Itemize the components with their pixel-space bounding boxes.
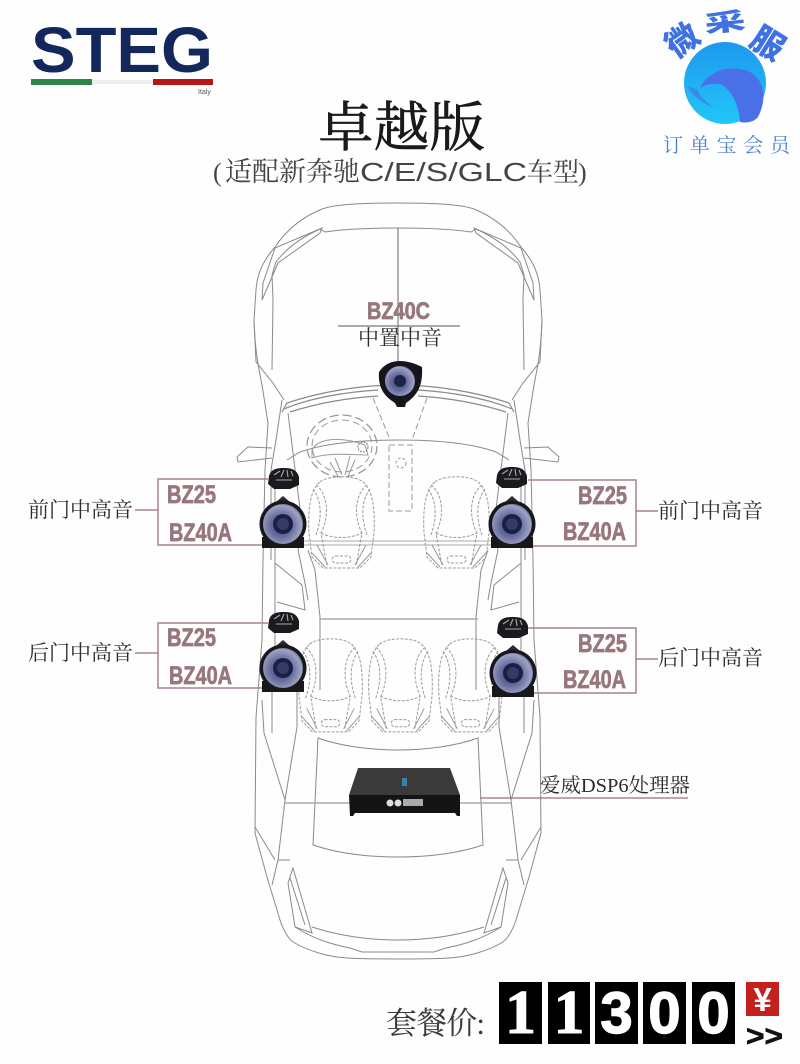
price block: 1 [505, 979, 536, 1047]
subtitle: C/E/S/GLC [360, 157, 527, 187]
woofer: front left [260, 496, 306, 548]
callout: front left: BZ40A [169, 519, 232, 547]
logo: STEG: Italy [198, 89, 211, 96]
rear seat middle [369, 639, 432, 732]
tweeter: front right [496, 467, 527, 488]
badge orb [684, 42, 766, 124]
rear seat left [299, 639, 362, 732]
subtitle: 适配新奔驰 [225, 157, 360, 187]
subtitle: 车型 [527, 158, 579, 187]
badge arc title: 采 [703, 1, 748, 40]
car body left half [237, 203, 398, 959]
arrows: >> [746, 1020, 783, 1053]
DSP callout: 爱威DSP6处理器 [540, 774, 690, 797]
front seat right [424, 477, 489, 568]
DSP processor unit [349, 768, 460, 816]
badge arc title [654, 1, 796, 70]
cabin cross bar [265, 541, 530, 545]
subtitle: ) [578, 158, 587, 187]
callout: rear right: 后门中高音 [658, 646, 763, 670]
centre console [373, 398, 427, 511]
digit 1 [499, 982, 542, 1044]
digit 1 [548, 982, 590, 1044]
roof rear line [320, 618, 478, 620]
woofer: front right [488, 496, 536, 548]
callout: front right: 前门中高音 [658, 499, 763, 523]
front seat left [309, 477, 374, 568]
steering wheel [307, 415, 377, 477]
callout: front right: BZ40A [563, 518, 626, 546]
rear seat right [439, 639, 502, 732]
tweeter: front left [268, 468, 299, 489]
callout: front right: BZ25 [578, 482, 627, 510]
price block: 1 [554, 979, 584, 1047]
speaker: centre BZ40C [379, 361, 422, 407]
digit 0 [692, 982, 735, 1044]
price block [386, 979, 783, 1053]
callout: rear right [528, 628, 763, 694]
woofer: rear left [260, 640, 306, 692]
currency badge [746, 982, 779, 1016]
car outline diagram [237, 203, 559, 959]
callout: front right [528, 480, 763, 546]
price block: 3 [600, 981, 633, 1046]
title: 卓越版 [318, 98, 485, 158]
callout: rear left: 后门中高音 [28, 641, 133, 665]
subtitle: ( [213, 158, 222, 187]
price block: ¥ [753, 981, 772, 1018]
price block: 0 [648, 981, 681, 1046]
tweeter: rear left [268, 612, 299, 633]
callout: front left: 前门中高音 [28, 498, 133, 522]
callout: rear right: BZ25 [578, 630, 627, 658]
digit 3 [595, 982, 638, 1044]
woofer: rear right [490, 645, 536, 697]
hood centre line [397, 228, 399, 361]
subtitle [213, 157, 587, 187]
badge arc title: 服 [742, 12, 796, 70]
logo: STEG: STEG [31, 14, 213, 86]
price block: 0 [697, 981, 730, 1046]
price label: 套餐价: [386, 1006, 485, 1041]
speakers: door units [260, 467, 536, 697]
digit 0 [643, 982, 686, 1044]
logo: watermark badge [654, 1, 796, 157]
callout: rear left [28, 623, 268, 690]
callout: front left: BZ25 [167, 481, 216, 509]
badge arc title: 微 [654, 9, 708, 67]
label: centre speaker: 中置中音 [358, 326, 442, 350]
label: centre speaker [338, 298, 460, 350]
badge wave tail [688, 86, 713, 107]
label: centre speaker: BZ40C [367, 298, 430, 325]
badge subtitle: 订单宝会员 [663, 134, 792, 157]
tweeter: rear right [497, 617, 528, 638]
callout: front left [28, 479, 268, 547]
car body right half [398, 203, 559, 959]
badge wave [700, 68, 763, 122]
callout: rear left: BZ40A [169, 662, 232, 690]
callout: rear left: BZ25 [167, 624, 216, 652]
callout: rear right: BZ40A [563, 666, 626, 694]
